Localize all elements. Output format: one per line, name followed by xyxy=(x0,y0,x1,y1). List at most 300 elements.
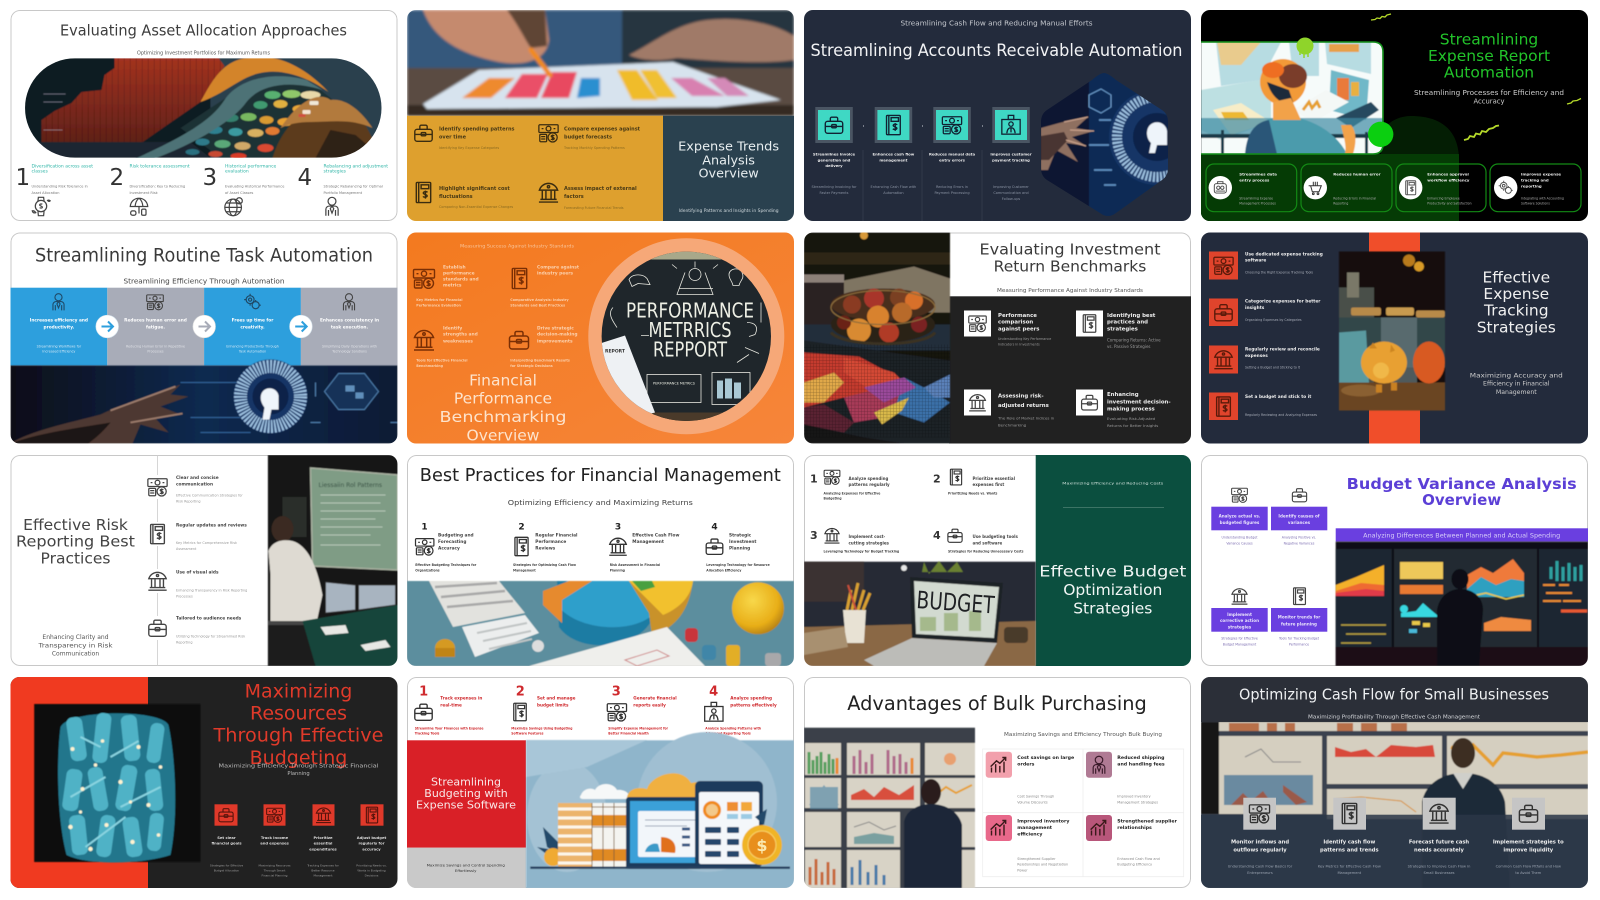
subtitle: Planning xyxy=(287,771,310,777)
photo: man viewing charts wall xyxy=(804,728,975,888)
item: strengths: Identify xyxy=(443,326,462,332)
laptop screen word: BUDGET xyxy=(916,586,996,619)
arrow 3 xyxy=(290,315,312,338)
item: external factors: factors xyxy=(564,194,584,200)
item 2: Diversification: Key to Reducing xyxy=(130,185,185,189)
column 2: Processes xyxy=(147,350,164,354)
panel: green title xyxy=(1036,455,1191,666)
benefit 4: relationships xyxy=(1117,825,1152,831)
benefit 2: Improved Inventory xyxy=(1117,794,1151,798)
tile: corrective action xyxy=(1211,589,1268,646)
subtitle band: Analyzing Differences Between Planned and Actual Spending xyxy=(1363,533,1560,540)
step: monitor: Monitor inflows and xyxy=(1231,839,1289,845)
item: compare expenses: budget forecasts xyxy=(564,134,612,140)
decorative lime blob xyxy=(1296,38,1314,58)
item: compare peers xyxy=(510,264,579,307)
slide background xyxy=(804,10,1191,221)
item: visual aids: Processes xyxy=(176,595,193,599)
title: Effective Budget xyxy=(1039,563,1186,581)
panel: gray subtitle xyxy=(407,848,526,889)
benefit 1: Cost savings on large xyxy=(1017,755,1074,761)
item: clear communication: Effective Communication Strategies for xyxy=(176,493,243,497)
step: adjust: accuracy xyxy=(362,847,381,851)
title xyxy=(1347,475,1577,509)
step 4: payment tracking xyxy=(992,157,1030,162)
subtitle: Measuring Success Against Industry Standards xyxy=(460,244,575,250)
step 4 xyxy=(990,107,1032,201)
slide: Streamlining Budgeting with Expense Software xyxy=(407,678,794,889)
tile: corrective action: Budget Management xyxy=(1223,642,1257,646)
item: best practices: vs. Passive Strategies xyxy=(1107,344,1150,349)
item 4: Advanced Reporting Tools xyxy=(705,731,751,735)
step: implement: Implement strategies to xyxy=(1493,839,1564,845)
tile: actual vs budgeted: Understanding Budget xyxy=(1222,536,1258,540)
step: expenditures: Better Resource xyxy=(311,869,335,873)
item 1: 1 xyxy=(810,472,818,485)
step: adjust: regularly for xyxy=(358,842,385,846)
item 3: Historical performance xyxy=(225,163,277,169)
photo: hand reaching to AI interface xyxy=(10,360,398,444)
item: compare expenses xyxy=(539,125,641,150)
item: peers xyxy=(964,310,1051,347)
title: Expense Software xyxy=(416,799,516,812)
title: Budgeting xyxy=(250,747,347,769)
step: adjust: Adjust budget xyxy=(357,836,386,840)
feature card 2: Reducing Errors in Financial xyxy=(1333,196,1376,200)
tile: corrective action: Implement xyxy=(1227,612,1252,617)
item 1 xyxy=(16,163,93,216)
item 2: Prioritizing Needs vs. Wants xyxy=(948,492,998,496)
step 2: Automation xyxy=(883,191,904,195)
item 1: Tracking Tools xyxy=(415,731,440,735)
item 2: budget limits xyxy=(537,702,569,707)
benefit 3 xyxy=(986,815,1069,872)
item: decision-making: making process xyxy=(1107,406,1155,412)
step 3: Payment Processing xyxy=(934,191,970,195)
item: tracking software: software xyxy=(1245,258,1266,264)
item 3: evaluation xyxy=(225,169,249,175)
item: regular updates: Key Metrics for Comprehensive Risk xyxy=(176,541,237,545)
item: strengths: weaknesses xyxy=(443,338,473,344)
item 1: Asset Allocation xyxy=(32,191,59,195)
slide background xyxy=(1202,456,1588,666)
tile: actual vs budgeted: Variance Causes xyxy=(1226,541,1253,545)
item 4 xyxy=(705,684,777,735)
item: risk-adjusted: Benchmarking xyxy=(998,423,1027,428)
item 3: Implement cost- xyxy=(848,534,886,539)
item: best practices: practices and xyxy=(1107,320,1148,326)
item: external factors xyxy=(539,183,637,210)
item: best practices: Comparing Returns: Active xyxy=(1107,337,1161,342)
title: Expense Report xyxy=(1428,47,1550,65)
step 4: Investment xyxy=(729,539,756,545)
item: best practices xyxy=(1076,310,1161,349)
item 4: patterns effectively xyxy=(730,702,777,707)
step: expenditures xyxy=(306,804,340,878)
item: decision-making: Enhancing xyxy=(1107,392,1139,398)
item: decision-making: investment decision- xyxy=(1107,399,1171,405)
title: Evaluating Investment xyxy=(980,241,1160,259)
photo: fruit bowl on colourful chart xyxy=(804,232,950,444)
benefit 2 xyxy=(1086,752,1165,804)
item: performance standards: Performance Evaluation xyxy=(416,303,462,307)
step 4: Allocation Efficiency xyxy=(706,569,741,573)
icon: globe xyxy=(225,198,242,216)
benefit 2: and handling fees xyxy=(1117,762,1165,768)
item: performance standards: Key Metrics for Financial xyxy=(416,298,462,302)
item: reconcile xyxy=(1209,346,1320,374)
photo: presenter at green board: Liessaiin Rol Patterns xyxy=(318,482,382,489)
subtitle: Maximizing Efficiency and Reducing Costs xyxy=(1062,480,1163,485)
item: compare peers: Standards and Best Practices xyxy=(510,303,565,307)
item: decisions: Drive strategic xyxy=(537,326,574,332)
photo: glowing blue glass jars xyxy=(34,704,201,862)
column 3: Enhancing Productivity Through xyxy=(226,344,279,348)
step: forecast: Strategies to Improve Cash Flow in xyxy=(1408,864,1470,868)
photo: chalkboard performance metrics report xyxy=(597,248,777,428)
item 3 xyxy=(607,684,677,735)
slide background xyxy=(1201,10,1588,221)
benefit grid xyxy=(983,749,1184,877)
step 1: Accuracy xyxy=(438,546,460,552)
subtitle: Efficiency in Financial xyxy=(1483,381,1550,388)
tile: monitor trends: future planning xyxy=(1281,621,1317,626)
step 4: 4 xyxy=(711,522,718,532)
title: Budgeting with xyxy=(424,787,508,800)
step 4 xyxy=(706,522,770,573)
arrow 1 xyxy=(96,315,118,338)
step 2: management xyxy=(879,157,908,162)
item: reconcile: Setting a Budget and Sticking to It xyxy=(1245,365,1301,369)
title: Effective xyxy=(1482,268,1550,286)
step: implement: Common Cash Flow Pitfalls and How xyxy=(1496,864,1561,868)
title: Financial xyxy=(469,371,537,389)
photo: piggy banks in jars xyxy=(1339,252,1445,410)
subtitle xyxy=(1470,372,1563,396)
item: regular updates: Regular updates and reviews xyxy=(176,522,247,528)
benefit 3: efficiency xyxy=(1017,832,1042,838)
item 2: Maximize Savings Using Budgeting xyxy=(511,726,572,730)
step: expenditures: Prioritize xyxy=(313,836,333,840)
title: Streamlining xyxy=(431,775,501,788)
step: income: Financial Planning xyxy=(261,874,288,878)
title: Analysis xyxy=(702,153,755,168)
subtitle: Optimizing Investment Portfolios for Maximum Returns xyxy=(137,50,270,56)
benefit 3: Power xyxy=(1017,868,1028,872)
item: budget: Set a budget and stick to it xyxy=(1245,394,1311,400)
top overlay xyxy=(1201,677,1588,722)
item: best practices: Identifying best xyxy=(1107,313,1156,319)
step 3: Management xyxy=(632,539,664,545)
step: forecast: Forecast future cash xyxy=(1409,839,1469,845)
column 4 xyxy=(301,288,398,366)
item: compare peers: Comparative Analysis: Industry xyxy=(510,298,569,302)
icon: person xyxy=(326,197,338,216)
illustration: budgeting software devices xyxy=(526,732,794,888)
title: Reporting Best xyxy=(16,533,135,551)
item 1: Streamline Your Finances with Expense xyxy=(415,726,483,730)
step 4: Improves customer xyxy=(990,151,1032,156)
item 4: Analyze Spending Patterns with xyxy=(705,726,761,730)
item: performance standards: metrics xyxy=(443,283,462,289)
red panel xyxy=(10,677,148,888)
item: clear communication: Clear and concise xyxy=(176,475,219,481)
step 2: Management xyxy=(513,569,536,573)
tile: actual vs budgeted xyxy=(1211,488,1268,545)
title: Maximizing xyxy=(245,680,352,702)
photo: chalkboard performance metrics report: METRRICS xyxy=(648,318,732,342)
step: income: and expenses xyxy=(260,842,290,846)
column 1: productivity. xyxy=(44,324,75,330)
slide background xyxy=(408,678,794,888)
step 1: Effective Budgeting Techniques for xyxy=(415,563,477,567)
step: expenditures: Management xyxy=(313,874,333,878)
slide: Best Practices for Financial Management xyxy=(407,456,794,666)
benefit 1 xyxy=(986,752,1074,804)
photo: chalkboard performance metrics report: PERFORMANCE xyxy=(626,298,754,322)
step: monitor xyxy=(1228,798,1293,875)
benefit 1: Cost Savings Through xyxy=(1017,794,1054,798)
item 3 xyxy=(810,528,899,553)
title xyxy=(1039,563,1186,618)
subtitle: Identifying Patterns and Insights in Spending xyxy=(679,208,779,213)
slide: Maximizing Resources Through Effective Budgeting xyxy=(10,677,398,888)
icon: umbrella xyxy=(130,198,148,215)
item: clear communication xyxy=(146,475,243,504)
item: tracking software: Choosing the Right Expense Tracking Tools xyxy=(1245,270,1313,274)
slide: Effective Expense Tracking Strategies xyxy=(1201,232,1588,444)
step: implement xyxy=(1493,798,1564,875)
item: decisions: improvements xyxy=(537,338,573,344)
item: decision-making xyxy=(1076,390,1171,428)
item 3: Evaluating Historical Performance xyxy=(225,185,284,189)
step 3 xyxy=(929,107,975,195)
slide: Budget Variance Analysis Overview xyxy=(1202,456,1588,666)
title: Performance xyxy=(454,390,552,408)
feature card 1: Management Processes xyxy=(1239,201,1276,205)
title xyxy=(1477,268,1556,336)
bottom overlay xyxy=(1201,815,1588,888)
photo: analyst viewing dashboards xyxy=(1336,542,1588,666)
item 1: Analyze spending xyxy=(848,476,888,481)
step: adjust xyxy=(356,804,387,878)
column 4: task execution. xyxy=(331,324,368,330)
feature card 4: tracking and xyxy=(1521,177,1549,182)
item: external factors: Forecasting Future Financial Trends xyxy=(564,206,624,210)
subtitle: Maximize Savings and Control Spending xyxy=(427,863,505,868)
item: categorize: Categorize expenses for better xyxy=(1245,298,1321,304)
bottom band xyxy=(1201,154,1459,221)
item 2: expenses first xyxy=(972,482,1004,487)
feature card 1 xyxy=(1206,164,1297,212)
item: spending patterns: over time xyxy=(439,134,467,140)
item 3: 3 xyxy=(810,529,818,542)
item: visual aids: Enhancing Transparency in Risk Reporting xyxy=(176,589,247,593)
feature card 2: Reporting xyxy=(1333,201,1348,205)
item: budget: Regularly Reviewing and Analyzing Expenses xyxy=(1245,413,1317,417)
benefit 4: Strengthened supplier xyxy=(1117,818,1178,824)
step 2: Enhancing Cash Flow with xyxy=(871,185,916,189)
title: Streamlining Routine Task Automation xyxy=(35,246,373,267)
item 1: real-time xyxy=(440,702,462,707)
item 4: 4 xyxy=(298,165,312,191)
feature card 4: Improves expense xyxy=(1521,171,1561,176)
title: Advantages of Bulk Purchasing xyxy=(847,692,1147,715)
subtitle: Measuring Performance Against Industry Standards xyxy=(997,288,1143,294)
column 2: Reducing Human Error in Repetitive xyxy=(126,344,185,348)
slide: Expense Trends Analysis Overview xyxy=(407,10,794,222)
item 1: 1 xyxy=(419,684,428,699)
item 1: Analyzing Expenses for Effective xyxy=(824,492,880,496)
column 4: Enhances consistency in xyxy=(320,318,379,324)
item: external factors: Assess impact of external xyxy=(564,186,637,192)
feature card 3: Enhances approval xyxy=(1427,171,1469,176)
step 2: Regular Financial xyxy=(535,532,578,538)
photo: presenter at green board xyxy=(268,455,398,666)
step 1: 1 xyxy=(421,522,428,532)
column 3: Task Automation xyxy=(238,350,266,354)
panel: yellow items xyxy=(407,116,663,222)
photo: laptop with BUDGET on desk xyxy=(804,561,1036,666)
item 4: Strategies for Reducing Unnecessary Costs xyxy=(948,549,1024,553)
step 1: delivery xyxy=(825,163,843,168)
photo: chalkboard performance metrics report: PERFORMANCE METRICS xyxy=(653,382,695,386)
step 2: Strategies for Optimizing Cash Flow xyxy=(513,563,576,567)
step 1 xyxy=(811,107,857,195)
title xyxy=(16,516,135,568)
step: income: Through Smart xyxy=(263,869,286,873)
column 4: Simplifying Daily Operations with xyxy=(322,344,377,348)
item: compare peers: industry peers xyxy=(537,270,573,276)
step 1: generation and xyxy=(818,157,851,162)
item: audience xyxy=(146,615,245,645)
arrow 2 xyxy=(193,315,216,338)
tile: causes: variances xyxy=(1288,520,1311,525)
step: goals: financial goals xyxy=(211,842,242,846)
item: performance standards xyxy=(414,264,479,307)
feature card 3 xyxy=(1396,164,1486,212)
tile: causes xyxy=(1271,489,1327,545)
subtitle xyxy=(218,764,378,777)
benefit 4: Budgeting Efficiency xyxy=(1117,863,1152,867)
item: strengths: Benchmarking xyxy=(416,364,444,368)
step: implement: to Avoid Them xyxy=(1515,871,1542,875)
subtitle: Management xyxy=(1496,389,1537,396)
item 1: classes xyxy=(32,169,48,175)
item: risk-adjusted: Assessing risk- xyxy=(998,394,1044,400)
title: Overview xyxy=(467,426,540,444)
item 2: Investment Risk xyxy=(130,191,159,195)
coin symbol: $ xyxy=(756,836,768,855)
connector dots xyxy=(863,126,983,127)
item: decisions: for Strategic Decisions xyxy=(510,364,553,368)
step 4: Strategic xyxy=(729,532,752,538)
item 2: Risk tolerance assessment xyxy=(130,163,190,169)
slide: Advantages of Bulk Purchasing xyxy=(804,678,1190,888)
column 2 xyxy=(107,288,204,366)
item: reconcile: Regularly review and reconcile xyxy=(1245,347,1320,353)
feature card 4: Software Solutions xyxy=(1521,201,1550,205)
item: spending patterns: Identify spending patterns xyxy=(439,126,514,132)
step 4: Follow-ups xyxy=(1002,197,1020,201)
slide background xyxy=(10,677,398,888)
photo: man viewing financial charts xyxy=(1201,677,1588,888)
title: Streamlining xyxy=(1440,30,1538,48)
subtitle xyxy=(1414,89,1564,106)
feature card 2: Reduces human error xyxy=(1333,171,1381,176)
title: Return Benchmarks xyxy=(994,257,1146,275)
slide background xyxy=(11,233,397,443)
step: adjust: Wants in Budgeting xyxy=(357,869,386,873)
subtitle: Optimizing Efficiency and Maximizing Returns xyxy=(508,499,693,507)
step 4: Leveraging Technology for Resource xyxy=(706,563,770,567)
item: clear communication: communication xyxy=(176,482,213,488)
feature card 3: Productivity and Satisfaction xyxy=(1427,201,1472,205)
benefit 4: Enhanced Cash Flow and xyxy=(1117,857,1160,861)
tile: actual vs budgeted: budgeted figures xyxy=(1220,520,1260,525)
step: adjust: Decisions xyxy=(365,874,379,878)
title xyxy=(440,371,566,444)
step: income: Track income xyxy=(261,836,289,840)
step 4: Improving Customer xyxy=(993,185,1029,189)
item: peers: against peers xyxy=(998,326,1040,332)
item 4: 4 xyxy=(933,529,941,542)
tile: monitor trends: Performance xyxy=(1289,642,1309,646)
item: performance standards: standards and xyxy=(443,277,479,283)
item: clear communication: Risk Reporting xyxy=(176,500,201,504)
step: identify: patterns and trends xyxy=(1320,848,1379,854)
step 1: Organizations xyxy=(415,569,440,573)
top right white panel xyxy=(804,233,1190,443)
tile: corrective action: Strategies for Effective xyxy=(1221,637,1258,641)
item: reconcile: expenses xyxy=(1245,354,1268,359)
item: compare expenses: Tracking Monthly Spending Patterns xyxy=(563,146,625,150)
item: risk-adjusted xyxy=(964,390,1055,428)
title: Overview xyxy=(698,167,759,182)
title: Strategies xyxy=(1073,600,1152,618)
benefit 3: Strengthened Supplier xyxy=(1017,857,1056,861)
icon: watch xyxy=(32,197,50,216)
tile: corrective action: corrective action xyxy=(1220,618,1259,623)
item: cost fluctuations: fluctuations xyxy=(439,194,473,200)
feature card 4: reporting xyxy=(1521,183,1542,188)
item: cost fluctuations: Comparing Non-Essential Expense Changes xyxy=(439,205,513,209)
step 2 xyxy=(871,107,916,195)
slide background xyxy=(408,456,794,666)
step 3 xyxy=(609,522,679,573)
item: compare expenses: Compare expenses against xyxy=(564,126,641,132)
illustration: person at desk with reports xyxy=(1201,42,1383,154)
slide: Streamlining Expense Report Automation xyxy=(1201,10,1588,221)
slide: Evaluating Investment Return Benchmarks xyxy=(804,232,1191,444)
step: implement: improve liquidity xyxy=(1503,848,1554,854)
photo: chalkboard performance metrics report: REPPORT xyxy=(653,337,728,361)
step 3: Reducing Errors in xyxy=(936,185,968,189)
subtitle: Maximizing Efficiency Through Strategic Financial xyxy=(218,764,378,770)
title xyxy=(416,775,516,812)
step: monitor: Understanding Cash Flow Basics for xyxy=(1228,864,1293,868)
item: decisions xyxy=(510,326,578,368)
step: income: Maximizing Resources xyxy=(258,864,291,868)
photo: hand touching AI interface in hexagon xyxy=(1041,73,1168,216)
title: Streamlining Accounts Receivable Automation xyxy=(810,41,1182,60)
subtitle: Accuracy xyxy=(1473,98,1505,106)
item: tracking software xyxy=(1209,252,1323,280)
column 2: fatigue. xyxy=(146,324,165,330)
item: visual aids: Use of visual aids xyxy=(176,570,219,576)
item 3: reports easily xyxy=(633,702,666,707)
subtitle band xyxy=(1336,528,1588,542)
